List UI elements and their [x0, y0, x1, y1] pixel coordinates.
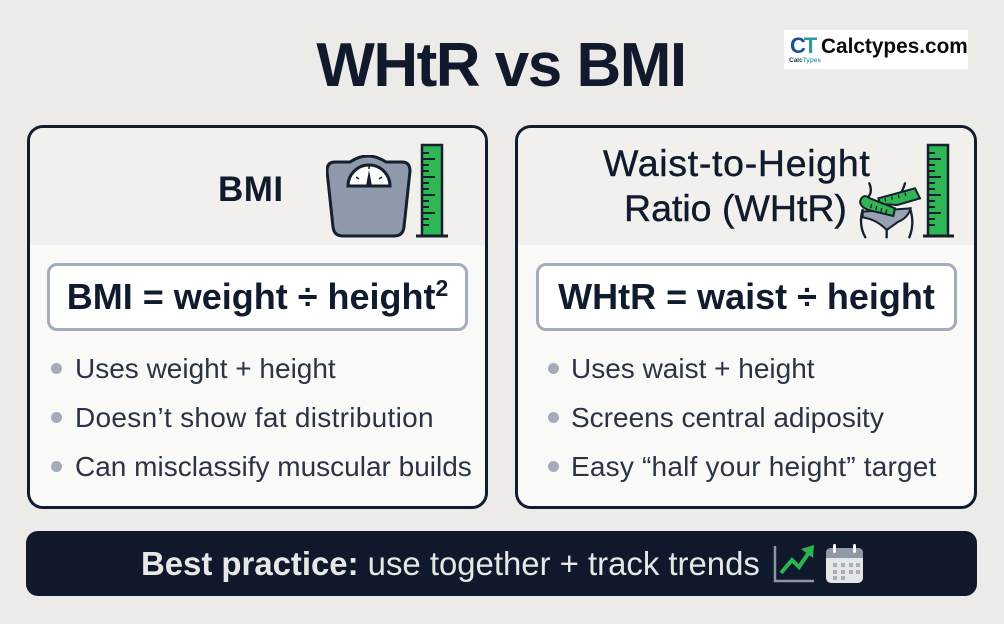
icon: green ruler [416, 144, 448, 238]
formula: BMI: BMI = weight ÷ height2 [67, 275, 448, 317]
panel: BMI [27, 125, 488, 509]
icon: green ruler [923, 144, 954, 238]
icon: trend chart [774, 545, 814, 582]
heading: Waist-to-Height Ratio: Ratio (WHtR) [624, 187, 847, 229]
bullet: half your height: Easy “half your height” target [571, 451, 937, 482]
banner text: Best practice: use together + track trends [141, 545, 760, 582]
bullet: muscular builds: Can misclassify muscular builds [75, 451, 472, 482]
bullet: fat distribution: Doesn’t show fat distribution [75, 402, 434, 433]
logo small text: CalcTypes [789, 57, 821, 64]
heading: BMI: BMI [218, 170, 284, 209]
bullet: waist + height: Uses waist + height [571, 353, 815, 384]
logo wordmark: Calctypes.com [821, 35, 968, 58]
icon: bathroom scale [326, 155, 412, 238]
heading: Waist-to-Height Ratio [602, 142, 871, 229]
heading: Waist-to-Height Ratio: Waist-to-Height [603, 142, 871, 184]
panel header background [30, 128, 485, 245]
title: WHtR vs BMI [316, 31, 686, 100]
logo: Calctypes.com [784, 30, 968, 69]
formula: WHtR: WHtR = waist ÷ height [558, 276, 935, 317]
banner: best practice [26, 531, 977, 596]
bullet: central adiposity: Screens central adiposity [571, 402, 884, 433]
formula: BMI [47, 263, 468, 331]
bullet: weight + height: Uses weight + height [75, 353, 336, 384]
formula: WHtR [536, 263, 957, 331]
panel header background [518, 128, 974, 245]
panel: WHtR [515, 125, 977, 509]
icon: waist with tape [859, 182, 922, 238]
logo mark: CT [790, 33, 815, 58]
icon: calendar [826, 544, 863, 583]
